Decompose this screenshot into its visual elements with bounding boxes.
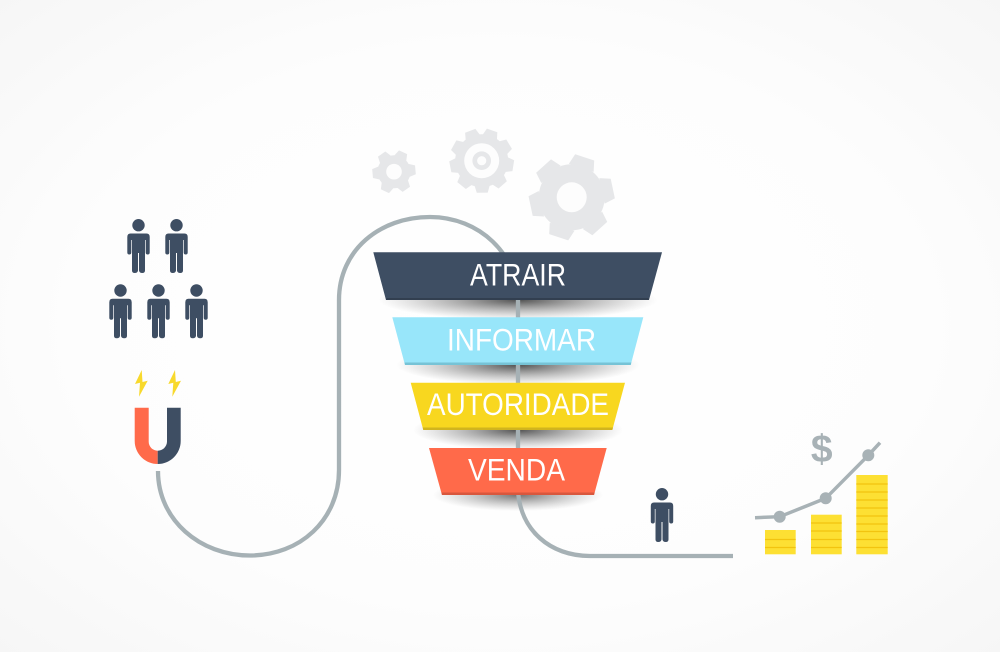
dollar sign: $ xyxy=(811,428,833,471)
icon: magnet xyxy=(135,408,181,464)
icon: lightning bolts xyxy=(135,370,181,397)
funnel level: ATRAIR xyxy=(373,252,662,300)
revenue chart xyxy=(755,428,888,554)
funnel level: AUTORIDADE xyxy=(411,383,625,430)
icon: customer xyxy=(651,488,673,542)
icon: middle gear xyxy=(449,128,514,193)
funnel shadows xyxy=(378,280,658,511)
icon: gears xyxy=(372,128,615,241)
icon: large gear xyxy=(528,153,615,241)
coin bars xyxy=(765,475,888,554)
funnel level: VENDA: VENDA xyxy=(468,452,565,488)
connecting path xyxy=(158,217,733,556)
funnel level: VENDA xyxy=(429,448,607,495)
funnel level: ATRAIR: ATRAIR xyxy=(470,256,566,292)
growth line xyxy=(755,443,880,523)
funnel level: INFORMAR: INFORMAR xyxy=(447,322,596,358)
icon: small gear xyxy=(372,149,416,194)
funnel xyxy=(373,252,662,495)
funnel level: AUTORIDADE: AUTORIDADE xyxy=(427,386,609,422)
funnel level: INFORMAR xyxy=(392,317,643,365)
icon: group of people xyxy=(109,219,208,338)
